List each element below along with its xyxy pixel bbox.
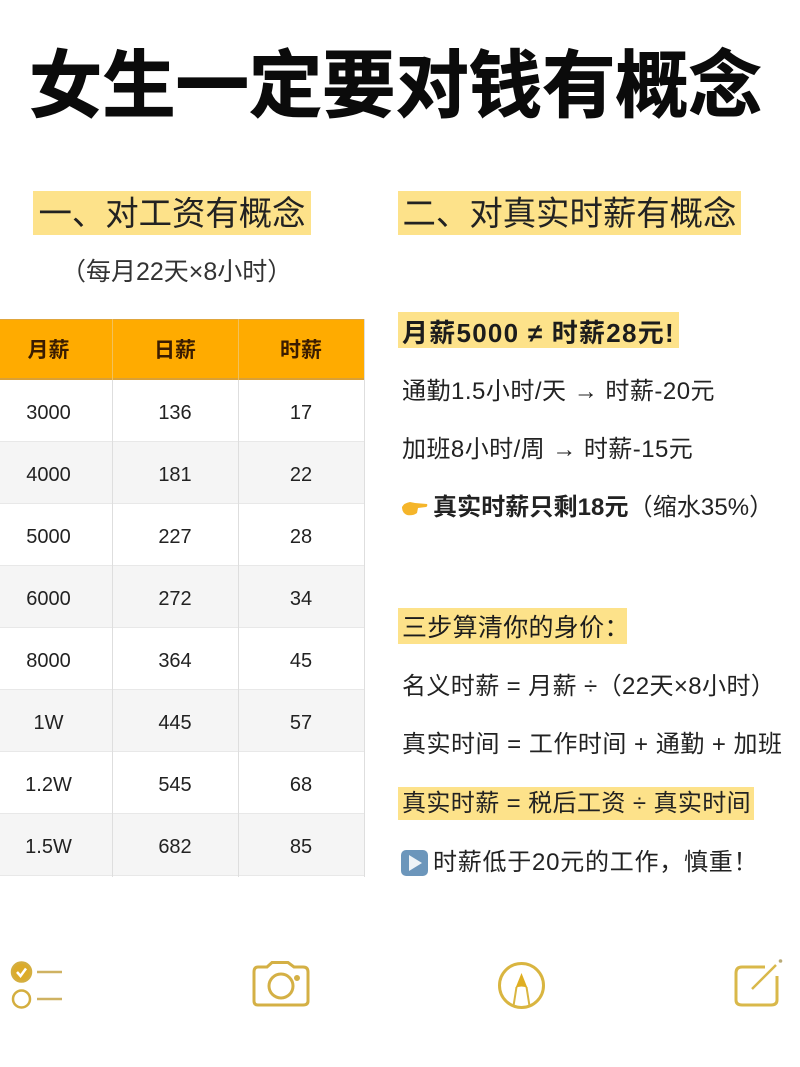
row 1W: 445 [158, 712, 192, 734]
row 1W: 1W [34, 712, 64, 734]
row 6000: 272 [158, 588, 192, 610]
row 3000: 3000 [26, 402, 71, 424]
row 5000: 5000 [26, 526, 71, 548]
row 1.2W: 1.2W [25, 774, 72, 796]
row 4000: 22 [290, 464, 312, 486]
row 1.5W: 1.5W [25, 836, 72, 858]
table header: 月薪 [28, 339, 70, 362]
table header [0, 319, 364, 380]
row 3000: 17 [290, 402, 312, 424]
row 1.5W: 85 [290, 836, 312, 858]
row 1W: 57 [290, 712, 312, 734]
icon: camera [252, 961, 310, 1006]
row 4000: 181 [158, 464, 192, 486]
icon: pencil circle [498, 962, 545, 1009]
text: commute: 通勤1.5小时/天 → 时薪-20元 [402, 378, 715, 405]
text: overtime: 加班8小时/周 → 时薪-15元 [402, 436, 693, 463]
salary table [0, 319, 365, 877]
row 4000: 4000 [26, 464, 71, 486]
heading: section two: 二、对真实时薪有概念 [403, 196, 736, 233]
row 5000: 28 [290, 526, 312, 548]
row 6000 [0, 566, 364, 628]
text: real time formula: 真实时间 = 工作时间 + 通勤 + 加班 [402, 731, 783, 758]
row 5000 [0, 504, 364, 566]
row 8000 [0, 628, 364, 690]
heading: section one: 一、对工资有概念 [38, 196, 306, 233]
row 1.2W: 68 [290, 774, 312, 796]
icon: play button [401, 850, 428, 876]
table header: 时薪 [280, 339, 322, 362]
row 5000: 227 [158, 526, 192, 548]
row 8000: 364 [158, 650, 192, 672]
text: real hourly wage result: 真实时薪只剩18元（缩水35%） [433, 494, 773, 521]
row 1.2W: 545 [158, 774, 192, 796]
icon: compose note [734, 959, 782, 1006]
row 1.2W [0, 752, 364, 814]
title: 女生一定要对钱有概念 [29, 45, 762, 127]
row 6000: 6000 [26, 588, 71, 610]
table header: 日薪 [154, 339, 196, 362]
row 4000 [0, 442, 364, 504]
text: warning: 时薪低于20元的工作，慎重！ [433, 849, 758, 876]
callout: real hourly wage formula: 真实时薪 = 税后工资 ÷ 真实时间 [402, 790, 751, 817]
row 3000: 136 [158, 402, 192, 424]
row 8000: 45 [290, 650, 312, 672]
callout: three steps heading: 三步算清你的身价： [402, 614, 630, 642]
row 3000 [0, 380, 364, 442]
icon: pointing hand [402, 502, 428, 516]
text: nominal hourly wage formula: 名义时薪 = 月薪 ÷（22天×8小时） [402, 673, 775, 700]
subheading: basis of calculation: （每月22天×8小时） [61, 258, 292, 286]
row 1.5W: 682 [158, 836, 192, 858]
row 6000: 34 [290, 588, 312, 610]
row 1.5W [0, 814, 364, 876]
callout: monthly vs hourly: 月薪5000 ≠ 时薪28元! [402, 318, 675, 348]
row 8000: 8000 [26, 650, 71, 672]
row 1W [0, 690, 364, 752]
icon: checklist [10, 961, 62, 1009]
